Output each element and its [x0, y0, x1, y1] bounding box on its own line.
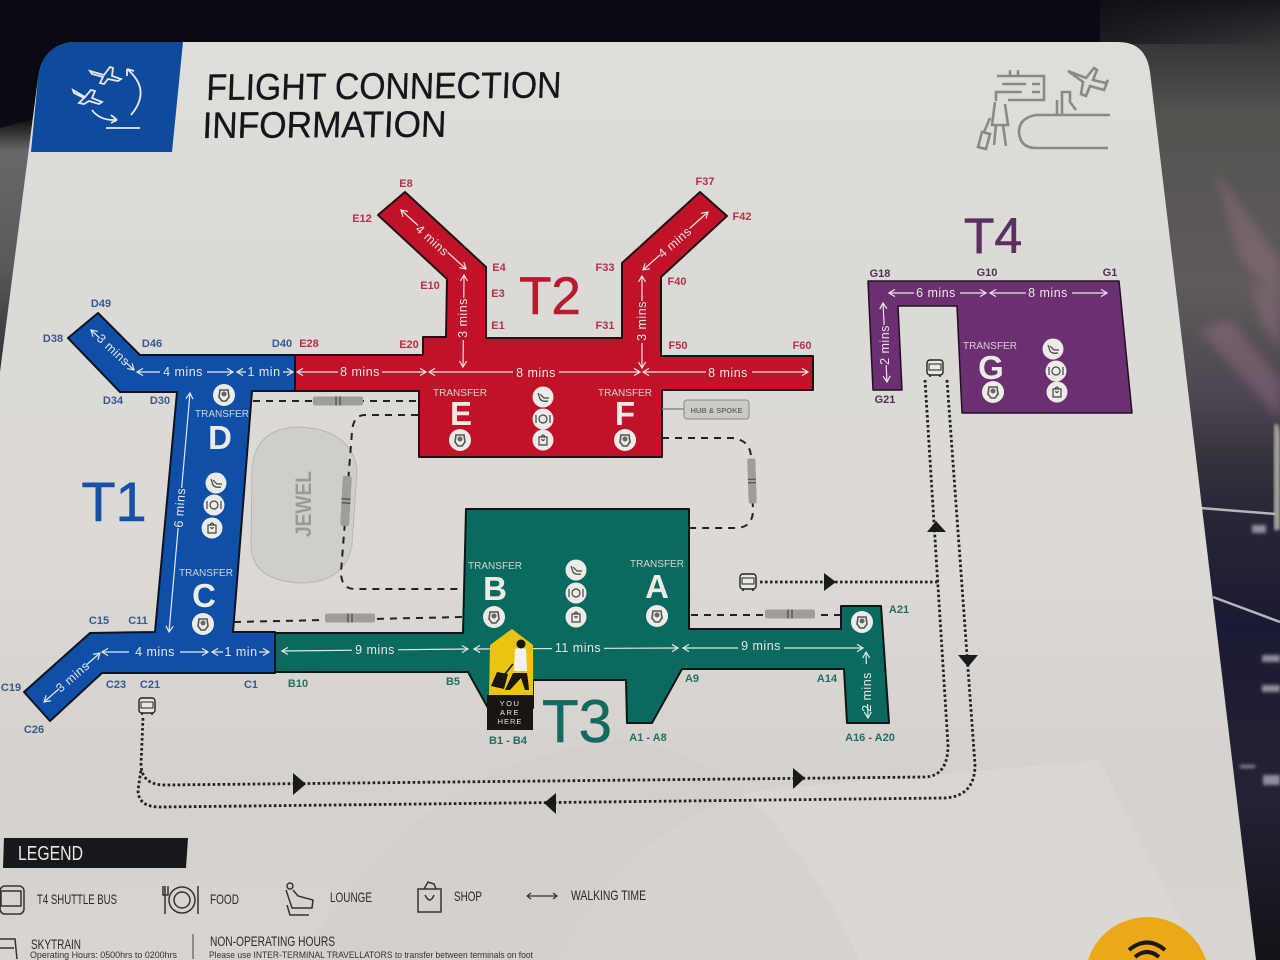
T2 gate labels: F42	[733, 211, 751, 223]
T2 gate labels: F31	[596, 320, 614, 332]
T3 amenities	[566, 560, 586, 628]
legend item: skytrain: SKYTRAIN	[31, 936, 81, 952]
T4 amenities	[1042, 338, 1068, 402]
T1 walking times	[44, 330, 293, 702]
T3 gate labels: B10	[288, 678, 308, 690]
T4 walking times: 2 mins	[878, 325, 892, 365]
transfer E: TRANSFER	[433, 388, 487, 399]
T2 gate labels: F40	[668, 276, 686, 288]
T2 gate labels	[299, 176, 811, 352]
transfer B: B	[483, 570, 507, 607]
legend heading	[3, 838, 188, 868]
hub and spoke tag	[662, 400, 749, 419]
T2 gate labels: E1	[491, 320, 505, 332]
T3 walking times	[282, 639, 874, 718]
terminal T3 (green)	[275, 509, 889, 723]
legend item: lounge: LOUNGE	[330, 889, 372, 905]
legend item: food	[163, 886, 239, 914]
lighter reflection on lower sign	[560, 760, 1200, 960]
T2 gate labels: F33	[596, 262, 614, 274]
T4 walking times: 8 mins	[1028, 286, 1068, 300]
T1 gate labels: D30	[150, 395, 170, 407]
T2 gate labels: E20	[399, 339, 419, 351]
T2 walking times: 8 mins	[708, 366, 748, 380]
transfer E	[433, 388, 487, 451]
legend item: food: FOOD	[210, 891, 239, 907]
T1 gate labels: C23	[106, 679, 126, 691]
legend item: non-operating hours: NON-OPERATING HOURS	[210, 933, 335, 949]
jewel building: JEWEL	[291, 471, 316, 537]
T2 gate labels: E8	[399, 178, 413, 190]
T2 walking times: 3 mins	[456, 298, 470, 338]
T3 walking times: 11 mins	[555, 641, 601, 655]
T3 gate labels: B5	[446, 676, 460, 688]
T2 gate labels: F60	[793, 340, 811, 352]
transfer C	[179, 568, 233, 635]
grey table area at left	[0, 118, 36, 400]
icon: planes and transfer arrows	[73, 67, 141, 128]
T3 walking times: 9 mins	[741, 639, 781, 653]
T2 walking times	[297, 210, 808, 380]
legend item: skytrain	[0, 936, 177, 960]
T1 gate labels: D49	[91, 298, 111, 310]
transfer C: TRANSFER	[179, 568, 233, 579]
T3 gate labels: A21	[889, 604, 909, 616]
title: FLIGHT CONNECTION	[206, 64, 562, 108]
transfer F: TRANSFER	[598, 388, 652, 399]
transfer D	[195, 384, 249, 456]
legend item: walking time	[527, 887, 646, 903]
T3 walking times: 2 mins	[860, 672, 874, 712]
transfer E: E	[450, 395, 472, 432]
T3 gate labels: A1 - A8	[629, 732, 667, 744]
wifi badge	[1088, 917, 1206, 960]
legend item: non-operating hours	[193, 933, 533, 960]
T1 walking times: 6 mins	[172, 487, 188, 528]
transfer G	[963, 341, 1017, 403]
T1 gate labels: C1	[244, 679, 258, 691]
T1 gate labels: C19	[1, 682, 21, 694]
transfer F: F	[615, 395, 635, 432]
legend item: lounge	[286, 883, 372, 915]
T2 walking times: 4 mins	[655, 224, 694, 261]
terminal T1 (blue)	[24, 313, 295, 721]
T3 walking times: 9 mins	[355, 643, 395, 657]
hub and spoke tag: HUB & SPOKE	[690, 406, 743, 415]
T4 walking times	[878, 286, 1107, 382]
T4 gate labels: G1	[1103, 267, 1117, 279]
T3 gate labels: A14	[817, 673, 838, 685]
T4 gate labels	[870, 267, 1117, 406]
you are here marker: ARE	[500, 708, 520, 717]
header tab: blue icon block	[31, 42, 183, 152]
T2 amenities	[532, 386, 554, 450]
T1 gate labels: C21	[140, 679, 160, 691]
T1 walking times: 4 mins	[163, 365, 203, 379]
T2 gate labels: E12	[352, 213, 372, 225]
transfer C: C	[192, 577, 216, 614]
T1 gate labels: C11	[128, 615, 148, 627]
T1 walking times: 4 mins	[135, 645, 175, 659]
T2 gate labels: F50	[669, 340, 687, 352]
T3 gate labels	[288, 604, 909, 747]
you are here marker: YOU	[500, 699, 520, 708]
T1 walking times: 3 mins	[94, 331, 133, 369]
T4 walking times: 6 mins	[916, 286, 956, 300]
T4 shuttle bus routes (dotted)	[138, 360, 978, 814]
T2 walking times: 3 mins	[635, 301, 649, 341]
faint shadow across lower sign	[300, 740, 860, 960]
T2 walking times: 4 mins	[413, 222, 452, 259]
legend item: T4 shuttle bus: T4 SHUTTLE BUS	[37, 891, 117, 907]
transfer A	[630, 559, 684, 627]
legend item: walking time: WALKING TIME	[571, 887, 646, 903]
T1 walking times: 1 min	[247, 365, 281, 379]
T4 label: T4	[964, 208, 1022, 264]
T2 gate labels: F37	[696, 176, 714, 188]
T1 gate labels: D46	[142, 338, 162, 350]
transfer D: D	[208, 419, 232, 456]
transfer G: TRANSFER	[963, 341, 1017, 352]
legend heading: LEGEND	[18, 843, 83, 865]
T2 gate labels: E3	[491, 288, 505, 300]
T2 walking times: 8 mins	[516, 366, 556, 380]
T3 gate labels: A16 - A20	[845, 732, 895, 744]
T2 walking times: 8 mins	[340, 365, 380, 379]
T2 gate labels: E10	[420, 280, 440, 292]
T1 gate labels: C15	[89, 615, 109, 627]
A21 seat icon	[851, 611, 873, 633]
transfer B: TRANSFER	[468, 561, 522, 572]
T4 gate labels: G21	[875, 394, 895, 406]
transfer G: G	[978, 349, 1004, 386]
T1 amenities	[202, 472, 226, 538]
icon: traveller, counter and plane illustration	[978, 68, 1110, 149]
T2 gate labels: E4	[492, 262, 507, 274]
T1 walking times: 3 mins	[53, 659, 92, 695]
you are here marker: HERE	[498, 717, 522, 726]
legend item: shop	[418, 882, 482, 912]
terminal T2 (red)	[295, 192, 813, 457]
T1 gate labels: C26	[24, 724, 44, 736]
T4 gate labels: G10	[977, 267, 997, 279]
T2 label: T2	[519, 267, 581, 326]
T1 walking times: 1 min	[224, 645, 258, 659]
T1 gate labels: D34	[103, 395, 124, 407]
T1 gate labels: D38	[43, 333, 63, 345]
terminal T4 (purple)	[868, 281, 1132, 413]
T1 gate labels	[1, 298, 292, 736]
transfer A: TRANSFER	[630, 559, 684, 570]
T3 gate labels: B1 - B4	[489, 735, 528, 747]
jewel building	[251, 427, 357, 583]
you are here marker	[487, 629, 533, 730]
skytrain routes (dashed)	[234, 396, 840, 622]
legend item: shop: SHOP	[454, 888, 482, 904]
T1 label: T1	[81, 470, 147, 533]
T4 gate labels: G18	[870, 268, 890, 280]
legend item: T4 shuttle bus	[0, 886, 117, 914]
T1 gate labels: D40	[272, 338, 292, 350]
title	[202, 64, 562, 146]
photo backdrop at right	[980, 0, 1280, 960]
transfer B	[468, 561, 522, 628]
T2 gate labels: E28	[299, 338, 319, 350]
T3 gate labels: A9	[685, 673, 699, 685]
transfer F	[598, 388, 652, 451]
transfer A: A	[645, 568, 669, 605]
transfer D: TRANSFER	[195, 409, 249, 420]
T3 label: T3	[542, 688, 612, 755]
title: INFORMATION	[202, 103, 447, 146]
